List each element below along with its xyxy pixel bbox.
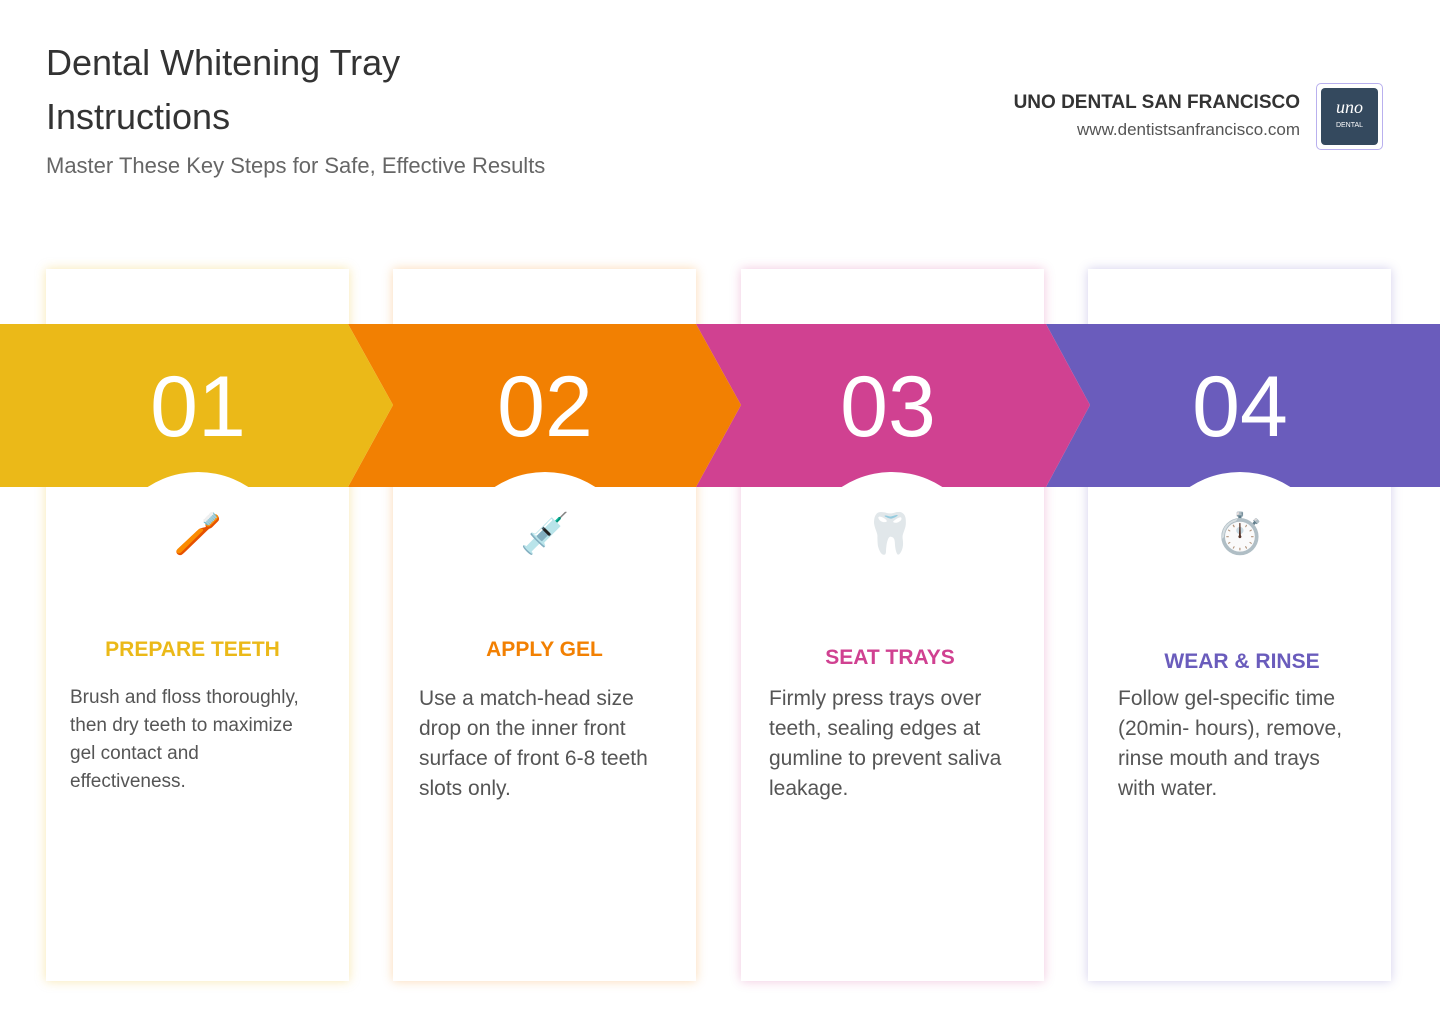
banner arrows bbox=[0, 324, 1440, 487]
subtitle: Master These Key Steps for Safe, Effective Results bbox=[46, 153, 545, 178]
card 2 bbox=[393, 269, 696, 981]
icon: syringe: 💉 bbox=[520, 512, 570, 556]
logo: DENTAL bbox=[1336, 122, 1363, 129]
step 3 text: Firmly press trays over teeth, sealing edges at gumline to prevent saliva leakage. bbox=[769, 687, 1001, 800]
logo bbox=[1316, 83, 1383, 150]
icon: tooth: 🦷 bbox=[865, 512, 915, 556]
banner arrows: 03 bbox=[840, 359, 936, 455]
title: Instructions bbox=[46, 96, 230, 137]
brand block bbox=[1014, 83, 1383, 150]
brand url: www.dentistsanfrancisco.com bbox=[1077, 120, 1300, 139]
logo: uno bbox=[1336, 97, 1363, 117]
title bbox=[46, 42, 400, 137]
card 4 bbox=[1088, 269, 1391, 981]
card 1 bbox=[46, 269, 349, 981]
step 1 title: PREPARE TEETH bbox=[105, 638, 280, 661]
step 4 title: WEAR & RINSE bbox=[1164, 650, 1320, 673]
banner arrows: 01 bbox=[150, 359, 246, 455]
banner arrows: 04 bbox=[1192, 359, 1288, 455]
banner arrows: 02 bbox=[497, 359, 593, 455]
card 3 bbox=[741, 269, 1044, 981]
title: Dental Whitening Tray bbox=[46, 42, 400, 83]
step 4 text: Follow gel-specific time (20min- hours), remove, rinse mouth and trays with water. bbox=[1118, 687, 1342, 800]
brand name: UNO DENTAL SAN FRANCISCO bbox=[1014, 92, 1300, 113]
step 2 title: APPLY GEL bbox=[486, 638, 603, 661]
step 1 text: Brush and floss thoroughly, then dry teeth to maximize gel contact and effectiveness. bbox=[70, 687, 299, 792]
step 3 title: SEAT TRAYS bbox=[825, 646, 955, 669]
step 2 text: Use a match-head size drop on the inner front surface of front 6-8 teeth slots only. bbox=[419, 687, 648, 800]
icon: toothbrush: 🪥 bbox=[173, 512, 223, 556]
icon: stopwatch: ⏱️ bbox=[1215, 512, 1265, 556]
